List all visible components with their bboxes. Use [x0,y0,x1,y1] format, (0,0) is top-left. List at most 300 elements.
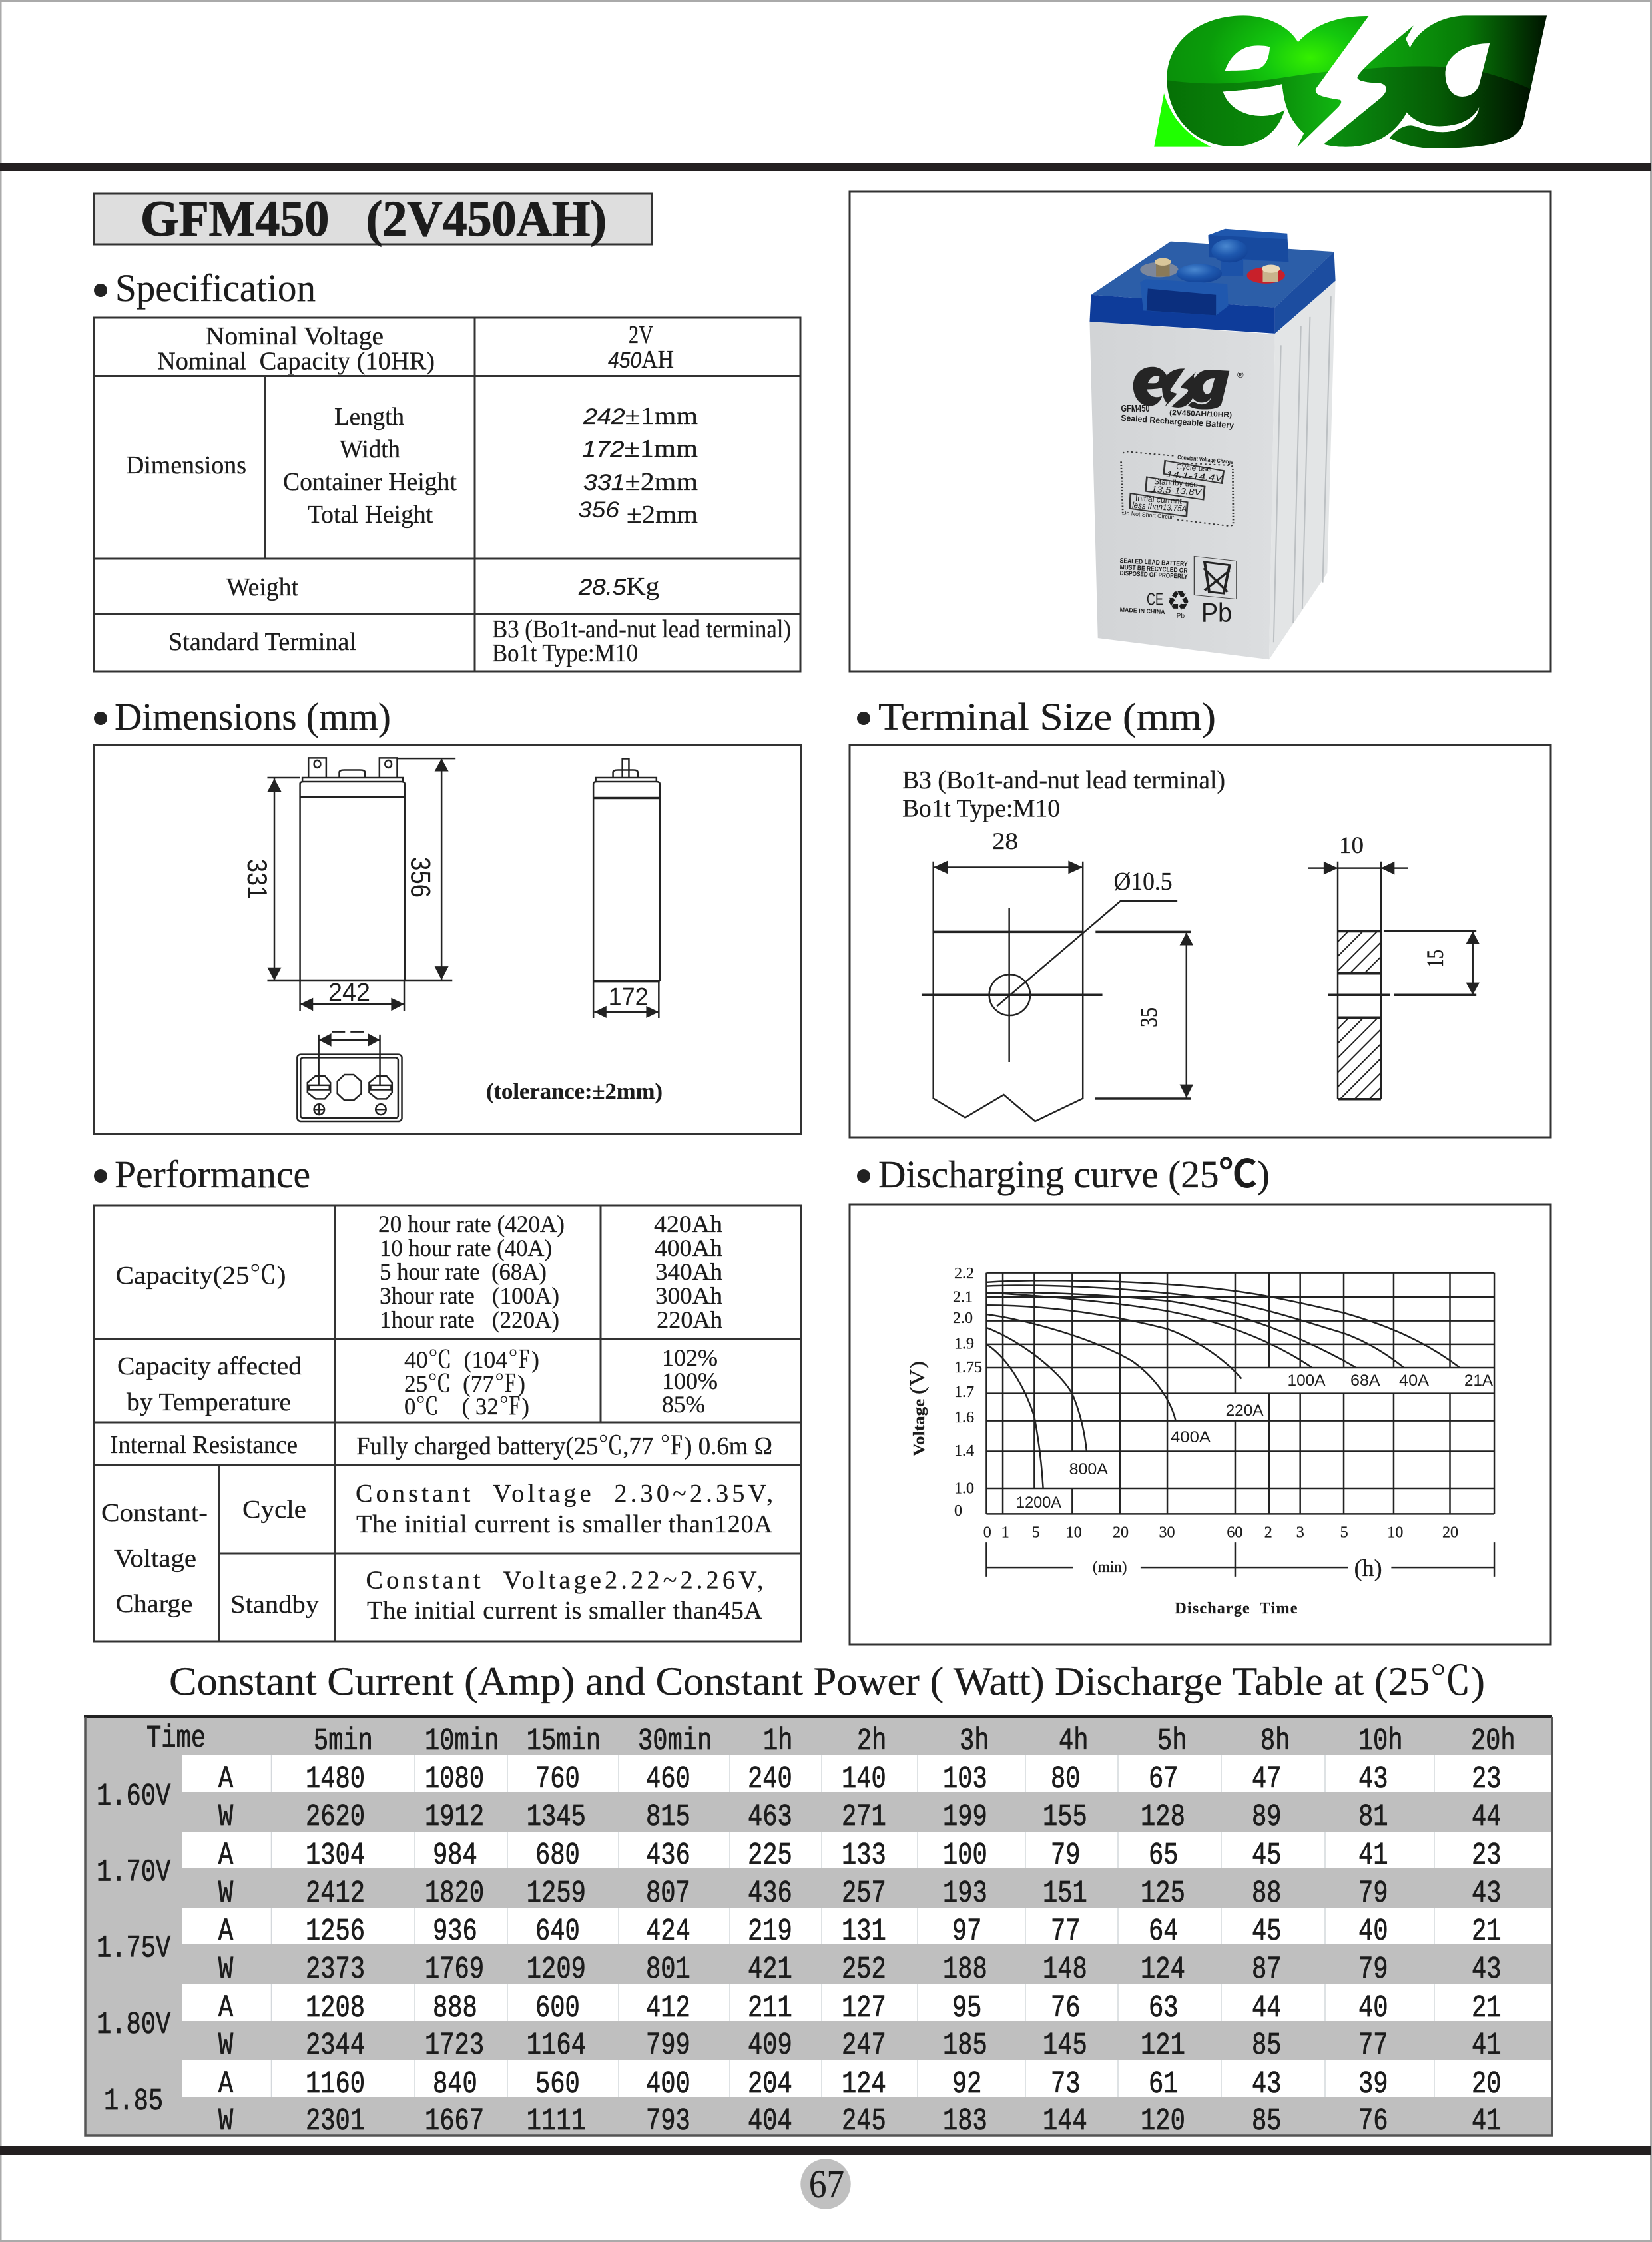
voltage group labels: 1.80V [97,2007,171,2042]
y axis labels: 0 [954,1502,962,1520]
panel: specification table: 356 [578,497,619,523]
panel: terminal size drawing [850,745,1551,1137]
row: 1.75V watts [218,1952,1502,1987]
row: 1.85 amps: 61 [1149,2066,1179,2102]
curve current labels: 800A [1069,1460,1108,1478]
panel: performance table: 420Ah [654,1211,722,1237]
panel: performance table: 40℃ (104℉) [404,1346,539,1373]
panel: performance table: 1hour rate (220A) [380,1306,559,1333]
battery label text: ♻ [1167,586,1191,617]
panel: terminal size drawing: Bo1t Type:M10 [902,795,1060,823]
row: 1.75V watts: 188 [943,1952,987,1987]
panel: performance table: Capacity affected [117,1352,302,1380]
battery label text: DISPOSED OF PROPERLY [1119,570,1188,581]
panel: discharge table [84,1717,1552,2139]
row: 1.75V amps: 40 [1358,1914,1388,1949]
row: 1.85 watts: 120 [1141,2103,1185,2139]
y axis labels: 1.0 [954,1480,974,1498]
row: 1.60V watts [218,1799,1502,1834]
row: 1.85 watts [218,2103,1502,2139]
x axis labels: 0 [983,1524,991,1541]
battery label text: MUST BE RECYCLED OR [1119,564,1188,575]
row: 1.70V watts: 193 [943,1876,987,1911]
panel: dimensions drawing: 242 [328,979,370,1007]
panel: performance table: 100% [662,1368,718,1394]
battery label text: ® [1237,370,1244,380]
row: 1.70V watts [218,1876,1502,1911]
row: 1.75V amps: 1256 [306,1914,365,1949]
panel: performance table: 25℃ (77℉) [404,1370,525,1397]
curve: 220A [986,1305,1242,1378]
row: 1.60V amps: 67 [1149,1761,1179,1797]
panel: dimensions drawing [94,745,801,1134]
row: 1.85 amps: 39 [1358,2066,1388,2102]
battery label text: less than13.75A [1132,500,1187,514]
row: 1.70V watts: 1259 [527,1876,586,1911]
row: 1.75V amps [218,1914,1502,1949]
row: 1.80V amps [218,1990,1502,2026]
page number [800,2159,851,2209]
voltage group labels: 1.75V [97,1931,171,1966]
row: 1.85 watts: 85 [1252,2103,1282,2139]
row: 1.70V amps: 1304 [306,1838,365,1873]
curve: 800A [986,1328,1087,1452]
panel: performance table: The initial current is smaller than45A [367,1597,763,1625]
battery label text [1119,370,1244,628]
y axis labels: 2.0 [953,1310,973,1327]
row: 1.70V amps: 984 [433,1838,477,1873]
battery label text: Standby use [1153,477,1199,489]
row: 1.75V watts: 801 [646,1952,690,1987]
panel: specification table: Nominal Voltage [206,322,384,350]
panel: specification table: 450AH [608,346,674,374]
footer bar [0,2146,1651,2155]
row: 1.70V amps: 225 [748,1838,792,1873]
panel: performance table: Constant Voltage 2.30~2.35V, [356,1480,773,1508]
terminal line art [922,861,1539,1121]
row: 1.80V watts: 145 [1043,2028,1087,2063]
table header row: 5h [1157,1723,1187,1759]
curve: 21A [986,1280,1459,1367]
row: 1.80V amps: 600 [535,1990,580,2026]
row: 1.60V watts: 1912 [425,1799,484,1834]
row: 1.70V watts: 2412 [306,1876,365,1911]
row: 1.70V watts: 257 [842,1876,886,1911]
heading: discharge table title: Constant Current (Amp) and Constant Power ( Watt) Discharge Table at (25℃) [169,1659,1485,1703]
row: 1.70V watts: 436 [748,1876,792,1911]
curve current labels: 68A [1350,1372,1380,1390]
row: 1.75V watts: W [218,1952,234,1987]
row: 1.80V watts: 77 [1358,2028,1388,2063]
row: 1.60V amps: 140 [842,1761,886,1797]
row: 1.85 watts: 76 [1358,2103,1388,2139]
heading: Dimensions (mm): Dimensions (mm) [115,695,391,738]
x axis labels: 5 [1340,1524,1348,1541]
panel: performance table: Capacity(25℃) [116,1262,286,1290]
panel: performance table: 400Ah [655,1235,722,1261]
row: 1.75V amps: 131 [842,1914,886,1949]
page number: 67 [809,2162,844,2206]
row: 1.60V watts: 155 [1043,1799,1087,1834]
panel: performance table: Fully charged battery(25℃,77 ℉) 0.6m Ω [356,1432,772,1460]
panel: specification table: 331±2mm [583,468,698,496]
row: 1.60V watts: 1345 [527,1799,586,1834]
row: 1.60V amps: 1080 [425,1761,484,1797]
row: 1.85 amps: 560 [535,2066,580,2102]
panel: performance table: Internal Resistance [110,1431,298,1459]
battery label text: Sealed Rechargeable Battery [1121,413,1235,431]
table header row: 1h [763,1723,793,1759]
panel: performance table: 220Ah [657,1306,722,1333]
row: 1.60V amps: 460 [646,1761,690,1797]
row: 1.85 amps: 400 [646,2066,690,2102]
battery label text: Pb [1201,599,1232,628]
curve current labels: 400A [1171,1428,1211,1446]
row: 1.60V watts: W [218,1799,234,1834]
row: 1.80V watts: 121 [1141,2028,1185,2063]
row: 1.60V watts: 199 [943,1799,987,1834]
panel: dimensions drawing: (tolerance:±2mm) [486,1079,663,1104]
panel: discharging curve chart: Discharge Time [1175,1600,1298,1617]
row: 1.60V amps: 80 [1051,1761,1081,1797]
panel: terminal size drawing: 10 [1339,832,1364,858]
row: 1.85 watts: 144 [1043,2103,1087,2139]
table header row: 5min [314,1723,373,1759]
row: 1.70V amps: 65 [1149,1838,1179,1873]
row: 1.60V watts: 81 [1358,1799,1388,1834]
row: 1.85 watts: 793 [646,2103,690,2139]
table header row: 3h [960,1723,989,1759]
row: 1.85 amps: A [218,2066,234,2102]
row: 1.85 amps: 204 [748,2066,792,2102]
battery label text: MADE IN CHINA [1119,607,1165,615]
row: 1.80V watts [218,2028,1502,2063]
row: 1.70V amps: 133 [842,1838,886,1873]
row: 1.80V amps: 412 [646,1990,690,2026]
row: 1.70V amps: A [218,1838,234,1873]
panel: terminal size drawing: 35 [1135,1007,1162,1027]
row: 1.80V amps: 211 [748,1990,792,2026]
row: 1.70V watts: 88 [1252,1876,1282,1911]
curve current labels: 220A [1226,1402,1264,1420]
panel: dimensions drawing: 172 [609,983,649,1011]
y axis labels: 1.7 [954,1384,974,1401]
x axis labels [983,1524,1458,1541]
icon: small esg mark on battery [1132,366,1229,410]
table header row: 2h [857,1723,886,1759]
panel: specification table: Width [340,435,400,463]
battery label text: 14.1-14.4V [1166,469,1224,483]
panel: performance table: 3hour rate (100A) [380,1282,559,1309]
panel: terminal size drawing: 15 [1422,950,1448,968]
panel: specification table [94,318,800,671]
header bar [0,163,1651,171]
curve current labels [1016,1372,1493,1512]
row: 1.80V watts: 185 [943,2028,987,2063]
row: 1.60V amps: 47 [1252,1761,1282,1797]
row: 1.85 amps: 92 [952,2066,981,2102]
x axis labels: 20 [1113,1524,1129,1541]
row: 1.80V amps: 1208 [306,1990,365,2026]
panel: dimensions drawing: 356 [405,857,437,898]
row: 1.75V watts: 43 [1472,1952,1502,1987]
row: 1.85 watts: 2301 [306,2103,365,2139]
row: 1.60V watts: 2620 [306,1799,365,1834]
battery label text: Cycle use [1176,462,1212,473]
row: 1.70V watts: 43 [1472,1876,1502,1911]
row: 1.75V watts: 421 [748,1952,792,1987]
table text [97,1721,1515,2139]
panel: terminal size drawing: 28 [992,828,1018,854]
table header row: 10h [1358,1723,1403,1759]
battery label text: Initial current [1135,493,1183,506]
row: 1.80V amps: 21 [1472,1990,1502,2026]
panel: specification table: 172±1mm [582,435,698,463]
panel: performance table: Charge [116,1590,193,1618]
y axis labels: 1.75 [954,1359,982,1376]
row: 1.60V amps: 1480 [306,1761,365,1797]
row: 1.70V watts: 807 [646,1876,690,1911]
curve: 400A [986,1314,1176,1421]
row: 1.80V amps: 76 [1051,1990,1081,2026]
panel: performance table: Cycle [242,1496,306,1524]
row: 1.85 watts: 245 [842,2103,886,2139]
panel: performance table: Constant Voltage2.22~2.26V, [366,1566,763,1594]
panel: discharging curve chart: (h) [1354,1555,1382,1581]
row: 1.70V amps: 79 [1051,1838,1081,1873]
y axis labels: 1.6 [954,1409,974,1426]
curve: 100A [986,1292,1311,1367]
x axis labels: 30 [1159,1524,1175,1541]
row: 1.60V watts: 271 [842,1799,886,1834]
row: 1.80V amps: A [218,1990,234,2026]
row: 1.80V amps: 888 [433,1990,477,2026]
row: 1.75V amps: 45 [1252,1914,1282,1949]
panel: terminal size drawing: Ø10.5 [1114,868,1173,896]
row: 1.75V amps: 640 [535,1914,580,1949]
table header row: Time [146,1721,206,1756]
table header row: 8h [1260,1723,1290,1759]
panel: performance table: The initial current is smaller than120A [356,1510,773,1538]
panel: specification table: Standard Terminal [168,628,356,656]
row: 1.75V watts: 1769 [425,1952,484,1987]
table header row: 20h [1471,1723,1515,1759]
x axis labels: 2 [1264,1524,1272,1541]
panel: performance table: Voltage [114,1545,196,1573]
row: 1.70V amps [218,1838,1502,1873]
panel: specification table: 2V [629,321,653,349]
row: 1.75V watts: 1209 [527,1952,586,1987]
row: 1.60V watts: 44 [1472,1799,1502,1834]
heading: Discharging curve: Discharging curve (25℃) [878,1143,1270,1199]
panel: specification table: Total Height [308,501,433,529]
row: 1.75V watts: 252 [842,1952,886,1987]
row: 1.80V amps: 44 [1252,1990,1282,2026]
panel: specification table: Nominal Capacity (10HR) [157,348,435,376]
curve: 68A [986,1292,1355,1367]
row: 1.70V amps: 41 [1358,1838,1388,1873]
row: 1.60V amps: 23 [1472,1761,1502,1797]
voltage group labels [97,1779,171,2119]
row: 1.80V amps: 127 [842,1990,886,2026]
row: 1.70V watts: 125 [1141,1876,1185,1911]
row: 1.85 amps: 20 [1472,2066,1502,2102]
row: 1.75V watts: 148 [1043,1952,1087,1987]
battery label text: 13.5-13.8V [1151,484,1203,497]
row: 1.80V watts: 2344 [306,2028,365,2063]
heading: Specification: Specification [115,266,316,310]
panel: performance table: Standby [230,1591,319,1619]
panel: performance table: 20 hour rate (420A) [378,1211,565,1237]
row: 1.80V amps: 40 [1358,1990,1388,2026]
row: 1.75V amps: 64 [1149,1914,1179,1949]
y axis labels: 2.2 [954,1265,974,1282]
row: 1.70V amps: 100 [943,1838,987,1873]
table header row: 15min [527,1723,601,1759]
curve current labels: 40A [1399,1372,1429,1390]
row: 1.60V amps [218,1761,1502,1797]
panel: specification table: Dimensions [126,451,246,479]
x axis labels: 10 [1066,1524,1082,1541]
battery label text: GFM450 [1121,403,1149,414]
panel: battery photo [850,192,1551,671]
panel: discharging curve chart [850,1205,1551,1645]
row: 1.80V watts: 85 [1252,2028,1282,2063]
time axis brackets [986,1542,1494,1577]
row: 1.70V watts: 1820 [425,1876,484,1911]
title: GFM450 (2V450AH) [140,191,607,247]
row: 1.75V watts: 124 [1141,1952,1185,1987]
row: 1.60V amps: 240 [748,1761,792,1797]
row: 1.85 amps: 124 [842,2066,886,2102]
front view, side view and top view line art [267,758,660,1121]
row: 1.75V amps: 97 [952,1914,981,1949]
x axis labels: 10 [1387,1524,1403,1541]
battery label text: Pb [1177,613,1185,620]
row: 1.75V amps: 77 [1051,1914,1081,1949]
row: 1.75V watts: 79 [1358,1952,1388,1987]
panel: specification table: Length [334,403,404,431]
row: 1.70V watts: 151 [1043,1876,1087,1911]
heading: Performance: Performance [115,1153,310,1196]
curve: 40A [986,1285,1403,1367]
row: 1.60V amps: 43 [1358,1761,1388,1797]
x axis labels: 20 [1442,1524,1458,1541]
row: 1.60V amps: 103 [943,1761,987,1797]
x axis labels: 5 [1032,1524,1040,1541]
y axis labels: 2.1 [953,1289,973,1306]
panel: specification table: ±2mm [627,501,698,529]
voltage group labels: 1.60V [97,1779,171,1814]
row: 1.75V watts: 87 [1252,1952,1282,1987]
row: 1.85 watts: 183 [943,2103,987,2139]
battery label text: Constant Voltage Charge [1177,454,1233,465]
panel: performance table: by Temperature [127,1388,291,1416]
row: 1.85 amps: 1160 [306,2066,365,2102]
panel: performance table: 0℃ ( 32℉) [404,1393,529,1420]
row: 1.60V amps: A [218,1761,234,1797]
row: 1.60V watts: 815 [646,1799,690,1834]
panel: performance table: 300Ah [655,1282,722,1309]
panel: performance table: 10 hour rate (40A) [380,1235,552,1261]
row: 1.60V watts: 128 [1141,1799,1185,1834]
row: 1.60V watts: 463 [748,1799,792,1834]
x axis labels: 60 [1227,1524,1242,1541]
row: 1.85 watts: 1667 [425,2103,484,2139]
row: 1.60V amps: 760 [535,1761,580,1797]
panel: specification table: 242±1mm [583,402,698,430]
row: 1.80V watts: 409 [748,2028,792,2063]
row: 1.85 watts: 1111 [527,2103,586,2139]
voltage group labels: 1.70V [97,1855,171,1890]
row: 1.85 watts: 404 [748,2103,792,2139]
panel: performance table: 340Ah [655,1259,722,1285]
x axis labels: 3 [1296,1524,1304,1541]
panel: specification table: 28.5Kg [578,573,659,601]
panel: specification table: Container Height [283,468,457,496]
table header row: 10min [425,1723,499,1759]
row: 1.80V watts: 1723 [425,2028,484,2063]
row: 1.70V amps: 436 [646,1838,690,1873]
table header row: 30min [638,1723,712,1759]
row: 1.70V watts: 79 [1358,1876,1388,1911]
panel: performance table [94,1205,801,1641]
logo: esg [1154,15,1547,148]
heading: Terminal Size (mm): Terminal Size (mm) [878,695,1216,738]
row: 1.70V amps: 23 [1472,1838,1502,1873]
panel: specification table: Bo1t Type:M10 [492,639,638,667]
row: 1.70V amps: 45 [1252,1838,1282,1873]
row: 1.80V watts: 799 [646,2028,690,2063]
battery label text: SEALED LEAD BATTERY [1119,557,1188,568]
chart: grid and discharge curves [986,1273,1494,1577]
row: 1.80V watts: 247 [842,2028,886,2063]
curve current labels: 1200A [1016,1494,1061,1512]
table header row: 4h [1059,1723,1089,1759]
voltage group labels: 1.85 [104,2084,163,2119]
row: 1.75V amps: A [218,1914,234,1949]
battery label text: (2V450AH/10HR) [1169,409,1233,419]
row: 1.80V amps: 95 [952,1990,981,2026]
curve: 1200A [986,1344,1043,1488]
row: 1.80V amps: 63 [1149,1990,1179,2026]
panel: terminal size drawing: B3 (Bo1t-and-nut lead terminal) [902,766,1225,794]
y axis labels [953,1265,982,1520]
y axis labels: 1.9 [954,1336,974,1353]
curve current labels: 21A [1464,1372,1493,1390]
row: 1.85 amps: 840 [433,2066,477,2102]
row: 1.80V watts: W [218,2028,234,2063]
row: 1.75V watts: 2373 [306,1952,365,1987]
row: 1.75V amps: 219 [748,1914,792,1949]
row: 1.85 amps [218,2066,1502,2102]
x axis labels: 1 [1001,1524,1009,1541]
row: 1.85 amps: 73 [1051,2066,1081,2102]
row: 1.75V amps: 936 [433,1914,477,1949]
icon: battery body and lid [1089,229,1336,659]
battery label text: Do Not Short Circuit [1122,509,1175,521]
row: 1.60V watts: 89 [1252,1799,1282,1834]
curve current labels: 100A [1288,1372,1325,1390]
row: 1.85 watts: 41 [1472,2103,1502,2139]
row: 1.70V amps: 680 [535,1838,580,1873]
row: 1.75V amps: 424 [646,1914,690,1949]
battery label text: CE [1147,589,1163,609]
row: 1.80V watts: 1164 [527,2028,586,2063]
panel: discharging curve chart: Voltage (V) [905,1361,929,1456]
panel: performance table: 102% [662,1344,718,1371]
y axis labels: 1.4 [954,1442,974,1460]
